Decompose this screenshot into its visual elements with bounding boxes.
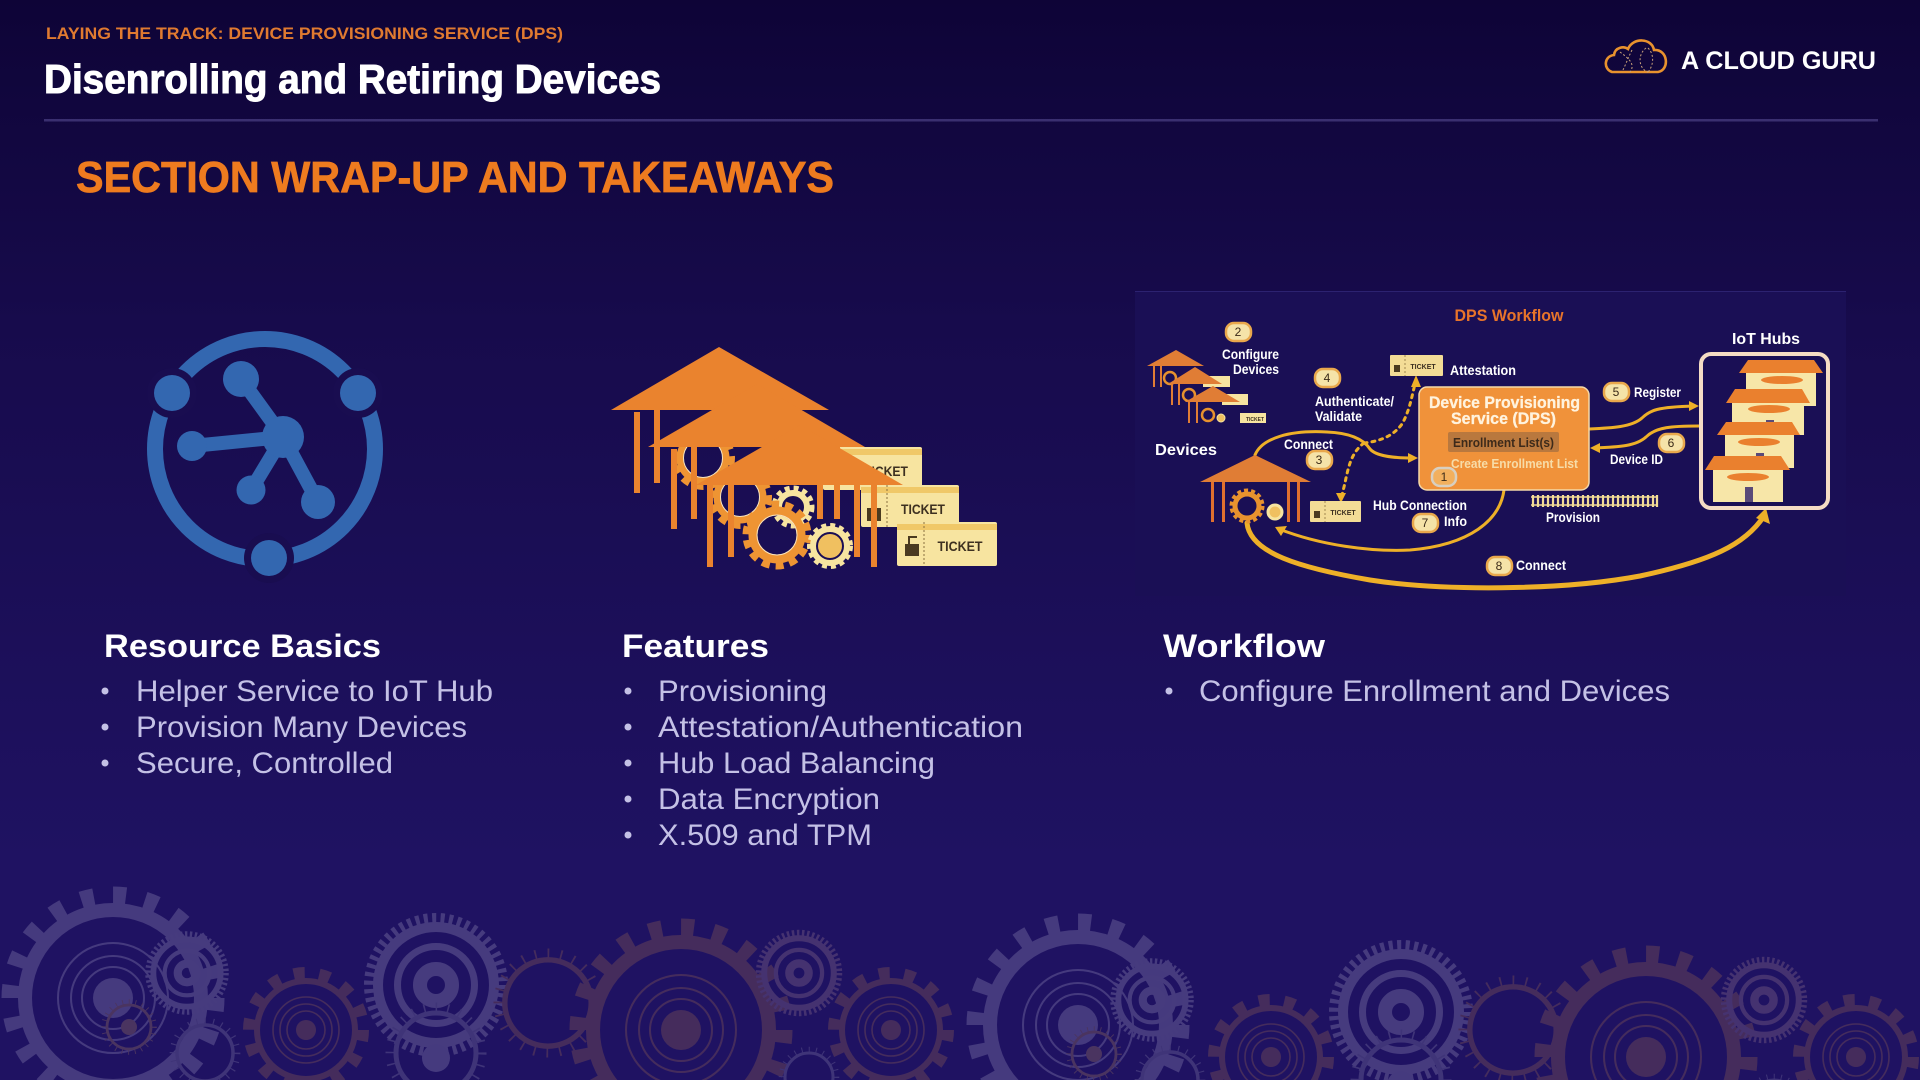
ticket stack: TICKET: [938, 538, 983, 554]
bullet list: Secure, Controlled: [136, 747, 393, 780]
label: provision: Provision: [1546, 510, 1600, 525]
panel: DPS workflow diagram: [1135, 291, 1846, 596]
label: authenticate: Authenticate/: [1315, 394, 1394, 409]
gears: [674, 429, 851, 567]
label: authenticate: [1315, 394, 1394, 424]
heading: Workflow: [1163, 628, 1325, 664]
ticket stack: TICKET: [901, 501, 945, 517]
logo: A Cloud Guru: [1606, 40, 1876, 75]
label: hub connection info: [1373, 498, 1467, 529]
label: devices: Devices: [1155, 442, 1217, 459]
step badges: 5: [1613, 385, 1620, 399]
railway track: [1531, 495, 1658, 507]
label: hub connection info: Info: [1444, 514, 1467, 529]
small stations: [1147, 350, 1266, 423]
label: configure devices: Configure: [1222, 347, 1279, 362]
background gears: [0, 880, 1920, 1080]
label: IoT hubs: IoT Hubs: [1732, 331, 1800, 348]
box: device provisioning service: Create Enrollment List: [1451, 457, 1579, 471]
ticket: hub connection: TICKET: [1330, 510, 1356, 517]
arrows: [1247, 380, 1764, 588]
small stations: TICKET: [1246, 417, 1264, 423]
bullet list: Hub Load Balancing: [658, 747, 935, 780]
heading: Features: [622, 628, 769, 664]
step badges: 6: [1668, 436, 1675, 450]
icon: DPS network ring: [147, 339, 383, 583]
label: configure devices: [1222, 347, 1279, 377]
label: hub connection info: Hub Connection: [1373, 498, 1467, 513]
label: device id: Device ID: [1610, 452, 1663, 467]
label: register: Register: [1634, 385, 1682, 400]
bullet list: Helper Service to IoT Hub: [136, 675, 493, 708]
box: device provisioning service: [1419, 387, 1589, 490]
ticket stack: TICKET: [864, 463, 908, 479]
eyebrow label: LAYING THE TRACK: DEVICE PROVISIONING SERVICE (DPS): [46, 24, 563, 43]
bullet list: [624, 675, 1023, 852]
label: connect: Connect: [1284, 437, 1333, 452]
label: authenticate: Validate: [1315, 409, 1362, 424]
title: Disenrolling and Retiring Devices: [44, 56, 661, 102]
step badges: 1: [1441, 470, 1448, 484]
bullet list: Data Encryption: [658, 783, 880, 816]
main station: [1200, 455, 1311, 522]
section heading: SECTION WRAP-UP AND TAKEAWAYS: [76, 153, 834, 202]
heading: Resource Basics: [104, 628, 381, 664]
stations: [611, 347, 903, 567]
bullet list: Provisioning: [658, 675, 827, 708]
box: device provisioning service: Service (DPS): [1451, 410, 1556, 428]
label: attestation: Attestation: [1450, 363, 1516, 378]
column: workflow: [1163, 628, 1670, 708]
label: configure devices: Devices: [1233, 362, 1279, 377]
ticket: attestation: [1390, 355, 1443, 376]
box: device provisioning service: Enrollment List(s): [1453, 435, 1554, 450]
step badges: 8: [1496, 559, 1503, 573]
box: device provisioning service: Device Provisioning: [1429, 394, 1580, 412]
bullet list: [102, 675, 493, 780]
step badges: 3: [1316, 453, 1323, 467]
IoT hubs box: [1701, 354, 1828, 508]
bullet list: Configure Enrollment and Devices: [1199, 675, 1670, 708]
step badges: 2: [1235, 325, 1242, 339]
bullet list: Provision Many Devices: [136, 711, 467, 744]
bullet list: X.509 and TPM: [658, 819, 872, 852]
bullet list: Attestation/Authentication: [658, 711, 1023, 744]
ticket: hub connection: [1310, 501, 1361, 522]
step badges: [1226, 323, 1684, 575]
label: connect: Connect: [1516, 558, 1566, 573]
ticket stack: [823, 447, 997, 566]
column: features: [622, 628, 1023, 852]
arrowheads: [1275, 375, 1770, 536]
column: resource basics: [102, 628, 493, 780]
logo: A Cloud Guru: A CLOUD GURU: [1681, 47, 1876, 75]
icon: stations, gears and tickets: [611, 347, 997, 567]
ticket: attestation: TICKET: [1410, 364, 1436, 371]
step badges: 7: [1422, 516, 1429, 530]
diagram title: DPS Workflow: [1454, 307, 1564, 325]
step badges: 4: [1324, 371, 1331, 385]
